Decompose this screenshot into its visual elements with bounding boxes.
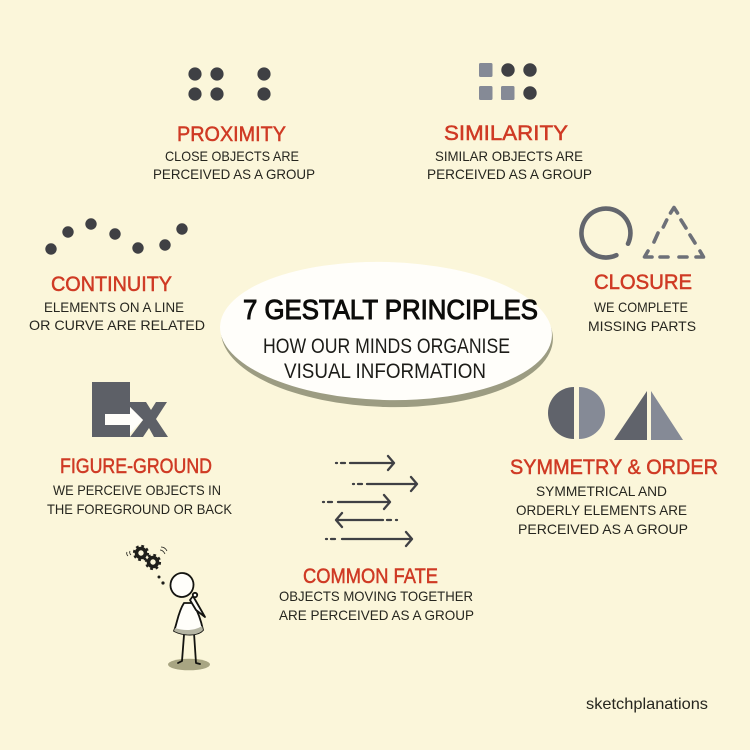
icon: Ex logo with hidden arrow bbox=[92, 382, 168, 437]
text: continuity description bbox=[29, 299, 205, 333]
panel: figure-ground bbox=[47, 382, 233, 517]
panel: symmetry and order bbox=[510, 387, 718, 537]
heading: proximity: PROXIMITY bbox=[177, 123, 286, 146]
icon: arrows moving together bbox=[323, 456, 417, 546]
text: symmetry description bbox=[516, 483, 688, 537]
text: figure-ground description bbox=[47, 482, 233, 517]
text: symmetry description: PERCEIVED AS A GROUP bbox=[518, 521, 688, 537]
text: symmetry description: SYMMETRICAL AND bbox=[536, 483, 667, 499]
icon: continuity dots bbox=[45, 218, 188, 255]
text: closure description bbox=[588, 299, 696, 334]
panel: continuity bbox=[29, 218, 205, 333]
text: figure-ground description: THE FOREGROUND OR BACK bbox=[47, 501, 233, 517]
text: common fate description bbox=[279, 588, 474, 623]
ground shadow bbox=[168, 659, 210, 670]
heading: continuity: CONTINUITY bbox=[51, 273, 172, 296]
text: closure description: WE COMPLETE bbox=[594, 299, 688, 315]
credit: sketchplanations: sketchplanations bbox=[586, 696, 708, 713]
subtitle: HOW OUR MINDS ORGANISE bbox=[263, 335, 510, 358]
ellipse bbox=[218, 258, 554, 404]
text: figure-ground description: WE PERCEIVE OBJECTS IN bbox=[53, 482, 221, 498]
subtitle bbox=[263, 335, 510, 383]
title: 7 GESTALT PRINCIPLES bbox=[243, 294, 538, 325]
text: symmetry description: ORDERLY ELEMENTS ARE bbox=[516, 502, 687, 518]
heading: closure: CLOSURE bbox=[594, 271, 692, 294]
panel: thinking figure bbox=[127, 546, 210, 670]
text: proximity description bbox=[153, 148, 315, 182]
heading: similarity: SIMILARITY bbox=[444, 122, 568, 145]
panel: common fate bbox=[279, 456, 474, 623]
text: closure description: MISSING PARTS bbox=[588, 318, 696, 334]
text: common fate description: ARE PERCEIVED AS A GROUP bbox=[279, 607, 474, 623]
text: proximity description: PERCEIVED AS A GROUP bbox=[153, 166, 315, 182]
text: continuity description: OR CURVE ARE RELATED bbox=[29, 317, 205, 333]
icon: gears and thought dots bbox=[127, 546, 167, 585]
heading: common fate: COMMON FATE bbox=[303, 565, 438, 588]
text: proximity description: CLOSE OBJECTS ARE bbox=[165, 148, 299, 164]
ellipse shadow bbox=[219, 259, 555, 411]
subtitle: VISUAL INFORMATION bbox=[284, 360, 486, 383]
heading: figure-ground: FIGURE-GROUND bbox=[60, 455, 212, 478]
text: similarity description bbox=[427, 148, 592, 182]
panel: closure bbox=[581, 208, 704, 334]
panel: proximity bbox=[153, 67, 315, 182]
icon: similarity squares and circles bbox=[479, 63, 537, 100]
text: similarity description: PERCEIVED AS A GROUP bbox=[427, 166, 592, 182]
icon: proximity dots bbox=[188, 67, 271, 101]
panel: similarity bbox=[427, 63, 592, 182]
panel: central title ellipse bbox=[218, 258, 555, 411]
icon: split circle and split triangle bbox=[548, 387, 683, 440]
text: similarity description: SIMILAR OBJECTS ARE bbox=[435, 148, 583, 164]
figure bbox=[169, 571, 205, 664]
icon: incomplete circle and dashed triangle bbox=[581, 208, 704, 258]
text: continuity description: ELEMENTS ON A LINE bbox=[44, 299, 184, 315]
heading: symmetry and order: SYMMETRY & ORDER bbox=[510, 456, 718, 479]
text: common fate description: OBJECTS MOVING TOGETHER bbox=[279, 588, 473, 604]
